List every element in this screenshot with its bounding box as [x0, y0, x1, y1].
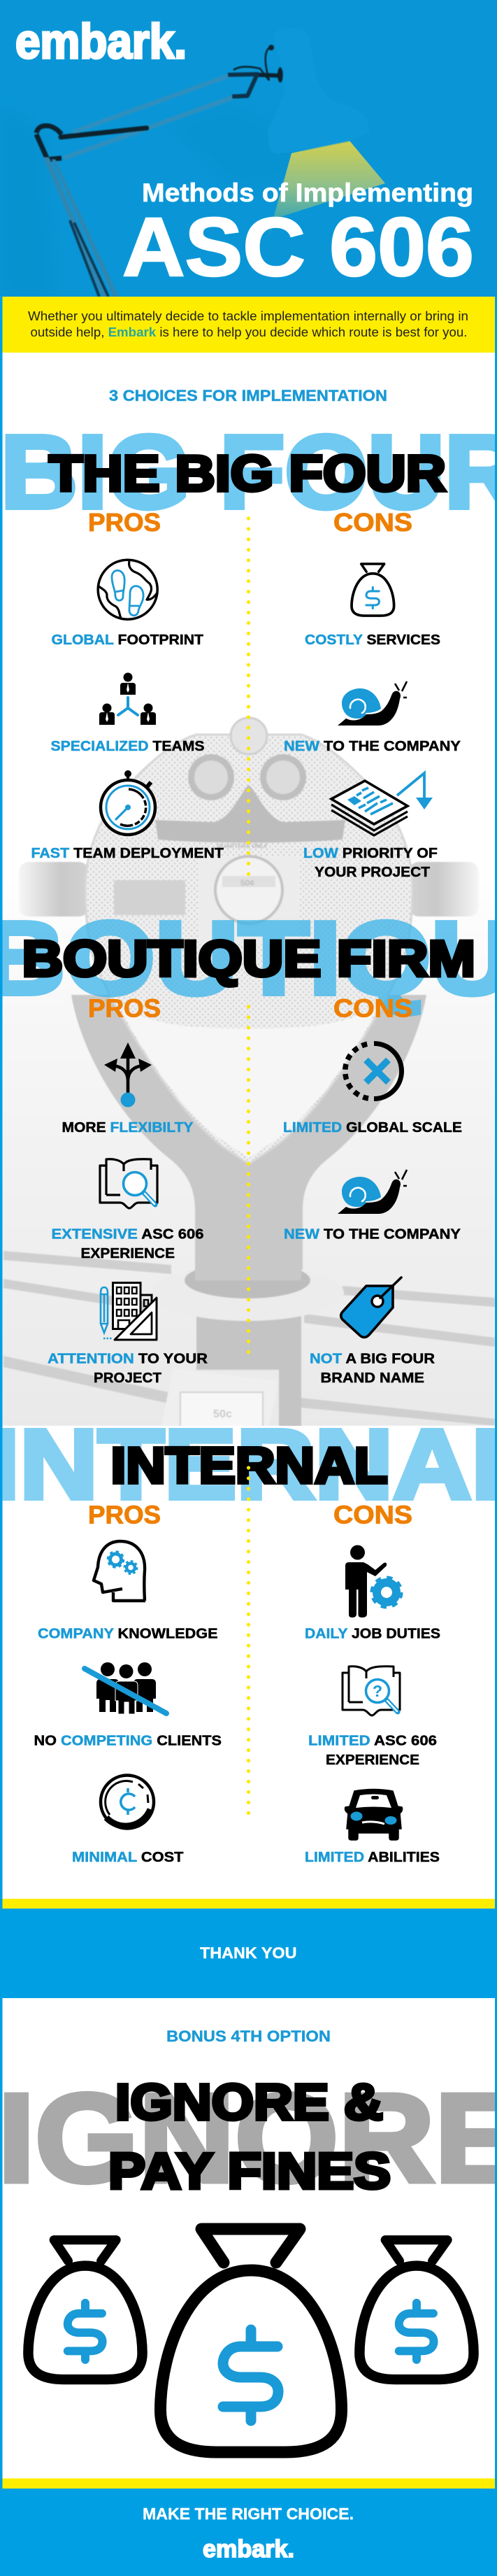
intro text line 1: Whether you ultimately decide to tackle implementation internally or bring in	[28, 309, 468, 323]
label: extensive asc 606 experience: EXPERIENCE	[81, 1245, 175, 1261]
logo: embark.	[15, 14, 187, 69]
label: low priority of your project	[304, 848, 438, 877]
label: costly services: COSTLY SERVICES	[305, 632, 440, 648]
section heading: 3 choices: 3 CHOICES FOR IMPLEMENTATION	[109, 387, 387, 404]
label: more flexibilty: MORE FLEXIBILTY	[62, 1119, 194, 1135]
icon: price tag	[341, 1278, 401, 1338]
yellow bar	[3, 2478, 495, 2489]
icon: book with question magnifier: ?	[373, 1682, 382, 1700]
icon: snail	[338, 1170, 407, 1214]
icon: money bag small	[352, 564, 394, 616]
label: attention to your project	[48, 1353, 208, 1382]
ghost word: IGNORE: IGNORE	[0, 2068, 497, 2209]
label: limited asc 606 experience: EXPERIENCE	[326, 1752, 419, 1768]
label: new to the company: NEW TO THE COMPANY	[284, 1226, 461, 1243]
label: low priority of your project: YOUR PROJECT	[315, 864, 430, 880]
label: attention to your project: ATTENTION TO YOUR	[48, 1350, 208, 1367]
heading: the big four: THE BIG FOUR	[49, 446, 446, 502]
cons heading: CONS	[333, 993, 412, 1023]
icon: book with question magnifier	[343, 1666, 400, 1715]
title line 1: Methods of Implementing	[142, 178, 473, 207]
icon: low priority stack	[331, 773, 433, 835]
icon: person with gear	[345, 1545, 401, 1618]
pros heading: PROS	[88, 993, 161, 1023]
label: daily job duties: DAILY JOB DUTIES	[305, 1626, 440, 1641]
label: low priority of your project: LOW PRIORITY OF	[303, 845, 438, 861]
label: not a big four brand name: NOT A BIG FOUR	[310, 1350, 435, 1367]
background photo: coin viewer	[3, 718, 495, 1427]
icon: book and magnifier	[100, 1159, 157, 1208]
label: fast team deployment: FAST TEAM DEPLOYMENT	[31, 845, 224, 861]
panel: internal	[0, 1409, 497, 1899]
label: limited global scale: LIMITED GLOBAL SCALE	[283, 1119, 462, 1135]
heading: ignore and pay fines: PAY FINES	[108, 2144, 391, 2200]
closing line: MAKE THE RIGHT CHOICE.	[143, 2505, 354, 2523]
icon: crossed out clients	[85, 1662, 166, 1714]
icon: coin	[101, 1776, 154, 1829]
background photo: coin viewer: QUARTERS ONLY	[217, 842, 268, 849]
label: no competing clients: NO COMPETING CLIENTS	[34, 1732, 222, 1749]
panel: bonus option	[0, 1998, 497, 2478]
label: not a big four brand name: BRAND NAME	[320, 1370, 424, 1386]
label: limited asc 606 experience: LIMITED ASC 606	[308, 1732, 437, 1749]
icon: specialized teams	[99, 673, 156, 725]
panel: boutique firm	[0, 901, 497, 1386]
label: extensive asc 606 experience	[52, 1229, 203, 1258]
icon: head with gears	[94, 1541, 145, 1601]
title line 2: ASC 606	[122, 201, 474, 294]
label: specialized teams: SPECIALIZED TEAMS	[50, 738, 204, 754]
label: minimal cost: MINIMAL COST	[72, 1849, 184, 1865]
label: attention to your project: PROJECT	[94, 1370, 161, 1386]
label: limited abilities: LIMITED ABILITIES	[305, 1849, 440, 1865]
intro band	[3, 297, 495, 353]
bonus heading: BONUS 4TH OPTION	[166, 2027, 331, 2045]
ghost word: INTERNAL: INTERNAL	[0, 1409, 497, 1520]
icon: limited scale ring	[345, 1044, 401, 1098]
icon: car	[345, 1790, 403, 1840]
lamp	[34, 44, 350, 297]
icon: branching arrows	[104, 1042, 152, 1107]
icon: snail	[338, 681, 407, 726]
yellow bar	[3, 1899, 495, 1909]
icon: money bag right	[359, 2240, 474, 2379]
label: not a big four brand name	[310, 1350, 435, 1386]
ghost word: BIG FOUR: BIG FOUR	[1, 414, 497, 530]
pros heading: PROS	[88, 508, 161, 537]
icon: money bag centre	[161, 2229, 341, 2452]
background photo: coin viewer: 50c	[213, 1408, 232, 1420]
label: extensive asc 606 experience: EXTENSIVE ASC 606	[52, 1226, 204, 1243]
label: company knowledge: COMPANY KNOWLEDGE	[38, 1626, 218, 1641]
icon: money bag left	[28, 2240, 143, 2379]
heading: ignore and pay fines	[108, 2075, 391, 2200]
label: new to the company: NEW TO THE COMPANY	[284, 738, 461, 754]
label: limited asc 606 experience	[308, 1732, 437, 1768]
background photo: coin viewer: 50¢	[240, 878, 254, 888]
heading: internal: INTERNAL	[110, 1438, 387, 1494]
light cone	[267, 140, 385, 241]
panel: the big four	[1, 414, 497, 880]
cons heading: CONS	[333, 508, 412, 537]
main white panel	[3, 353, 495, 1899]
thank you: THANK YOU	[200, 1944, 296, 1962]
pros heading: PROS	[88, 1500, 161, 1529]
heading: ignore and pay fines: IGNORE &	[115, 2075, 383, 2131]
icon: globe with footprints	[98, 560, 157, 619]
footer logo: embark.	[203, 2535, 294, 2563]
footer	[143, 2505, 354, 2563]
cons heading: CONS	[333, 1500, 412, 1529]
heading: boutique firm: BOUTIQUE FIRM	[22, 931, 475, 987]
label: global footprint: GLOBAL FOOTPRINT	[52, 632, 203, 648]
icon: stopwatch	[101, 770, 155, 835]
header	[0, 0, 497, 297]
icon: pencil, building and set square	[101, 1283, 157, 1340]
intro text line 2: outside help, Embark is here to help you decide which route is best for you.	[31, 325, 467, 339]
